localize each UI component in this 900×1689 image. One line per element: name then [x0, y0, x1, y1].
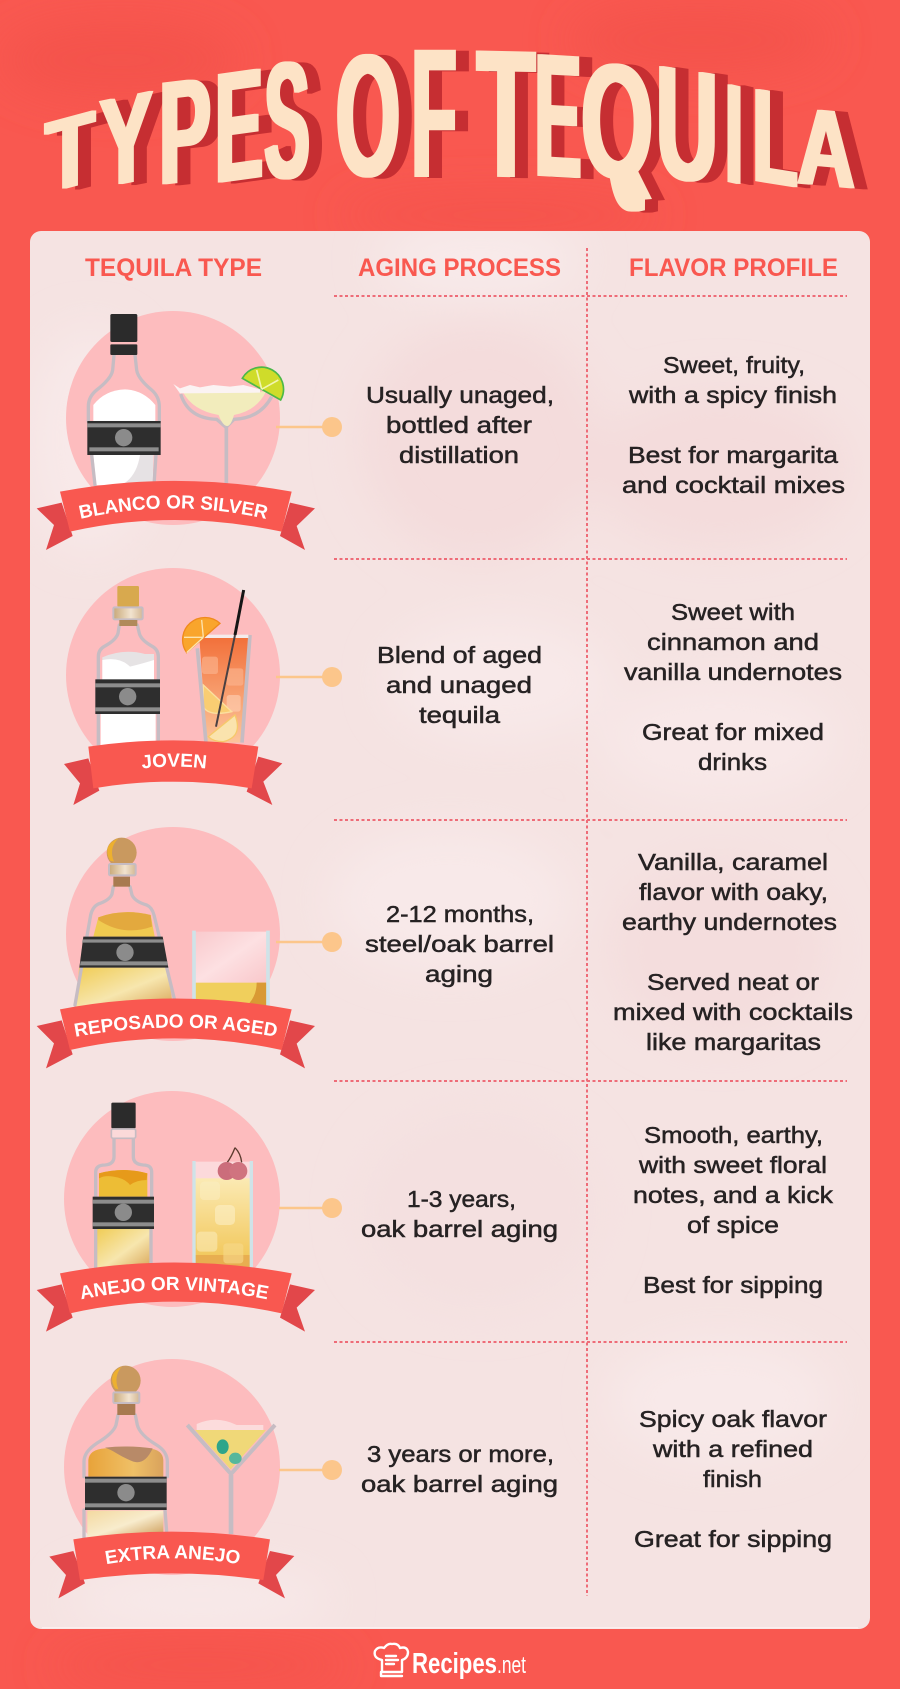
logo wordmark: Recipes: [412, 1648, 497, 1680]
connector: [276, 932, 342, 952]
title face layer: F: [411, 9, 457, 216]
ribbon: extra anejo: [49, 1532, 294, 1598]
column divider: vertical dashed: [586, 248, 588, 1596]
row 4: flavor text: notes, and a kick: [633, 1182, 833, 1208]
ribbon: joven: [64, 740, 282, 805]
icon: blanco bottle: [87, 314, 161, 485]
ribbon: blanco or silver: BLANCO OR SILVER: [78, 495, 268, 519]
connector: [276, 417, 342, 437]
heading: aging process: AGING PROCESS: [358, 254, 561, 282]
row 2: joven illustration: [64, 568, 342, 805]
row 4: flavor text: Smooth, earthy,: [644, 1122, 823, 1148]
ribbon: extra anejo: EXTRA ANEJO: [105, 1545, 240, 1564]
icon: extra anejo bottle: [84, 1366, 167, 1538]
circle backdrop: [64, 1091, 280, 1307]
title face layer: E: [535, 15, 581, 216]
title shadow layer: P: [172, 48, 224, 218]
title shadow layer: E: [228, 36, 276, 219]
row 1: flavor text: [622, 352, 845, 498]
row 5: aging text: [361, 1441, 558, 1497]
row 2: flavor text: Great for mixed: [642, 719, 824, 745]
column headings: [85, 254, 838, 282]
ribbon: reposado or aged: REPOSADO OR AGED: [74, 1014, 277, 1037]
row 1: flavor text: and cocktail mixes: [622, 472, 845, 498]
title shadow layer: A: [810, 86, 868, 214]
row 1: aging text: bottled after: [386, 412, 532, 438]
row 3: flavor text: Vanilla, caramel: [638, 849, 828, 875]
title shadow layer: Y: [112, 65, 166, 217]
icon: martini glass: [187, 1420, 275, 1534]
row 3: aging text: steel/oak barrel: [365, 931, 554, 957]
circle backdrop: [64, 1359, 280, 1575]
row 5: flavor text: finish: [703, 1466, 762, 1492]
logo suffix: .net: [497, 1652, 526, 1679]
title face layer: E: [215, 35, 263, 218]
row 5: flavor text: [634, 1406, 832, 1552]
connector: [279, 1460, 342, 1480]
title face layer: S: [264, 27, 310, 216]
ribbon: blanco or silver: [36, 480, 315, 550]
icon: margarita glass: [173, 367, 284, 484]
row 2: flavor text: Sweet with: [671, 599, 795, 625]
row 4: flavor text: of spice: [687, 1212, 779, 1238]
title shadow layer: L: [765, 62, 811, 218]
ribbon: reposado or aged: [36, 998, 315, 1068]
row 4: flavor text: Best for sipping: [643, 1272, 823, 1298]
row 3: flavor text: [613, 849, 853, 1055]
row 1: flavor text: Sweet, fruity,: [663, 352, 805, 378]
row 5: aging text: oak barrel aging: [361, 1471, 558, 1497]
row 3: flavor text: Served neat or: [647, 969, 819, 995]
row 4: aging text: 1-3 years,: [407, 1186, 516, 1212]
row 1: blanco or silver illustration: [36, 311, 342, 550]
title face layer: A: [797, 85, 855, 213]
icon: reposado bottle: [75, 838, 175, 1007]
row 1: aging text: distillation: [399, 442, 519, 468]
connector: [279, 1198, 342, 1218]
heading: flavor profile: FLAVOR PROFILE: [629, 254, 838, 282]
row 2: aging text: tequila: [419, 702, 501, 728]
row dividers: horizontal dotted: [334, 296, 847, 1342]
row 3: flavor text: earthy undernotes: [622, 909, 837, 935]
icon: rocks glass: [194, 931, 268, 1006]
row 1: aging text: [366, 382, 554, 468]
panel: table card: [30, 220, 870, 1630]
row 5: flavor text: Great for sipping: [634, 1526, 832, 1552]
title shadow layer: Q: [594, 28, 666, 218]
title face layer: [45, 9, 855, 219]
row 2: flavor text: cinnamon and: [647, 629, 819, 655]
title face layer: T: [45, 88, 95, 215]
row 1: aging text: Usually unaged,: [366, 382, 554, 408]
ribbon: anejo or vintage: [36, 1262, 315, 1332]
title face layer: U: [656, 31, 718, 219]
icon: tall glass with cherries: [194, 1148, 251, 1268]
row 5: extra anejo illustration: [49, 1359, 342, 1598]
title face layer: T: [477, 11, 535, 216]
icon: anejo bottle: [93, 1103, 154, 1268]
title shadow layer: T: [58, 89, 108, 216]
row 4: aging text: oak barrel aging: [361, 1216, 558, 1242]
row 1: flavor text: with a spicy finish: [628, 382, 837, 408]
row 5: flavor text: Spicy oak flavor: [639, 1406, 827, 1432]
row 3: aging text: [365, 901, 554, 987]
row 5: aging text: 3 years or more,: [367, 1441, 554, 1467]
title shadow layer: S: [277, 28, 323, 217]
title face layer: Q: [581, 27, 653, 217]
title face layer: I: [725, 54, 743, 216]
icon: chef hat book: [375, 1644, 408, 1676]
ribbon: joven: JOVEN: [142, 754, 206, 768]
circle backdrop: [66, 568, 280, 782]
title: types of tequila: [45, 9, 868, 220]
title shadow layer: F: [424, 10, 470, 217]
heading: tequila type: TEQUILA TYPE: [85, 254, 262, 282]
row 3: flavor text: mixed with cocktails: [613, 999, 853, 1025]
title shadow layer: E: [548, 16, 594, 217]
row 3: flavor text: flavor with oaky,: [639, 879, 828, 905]
title face layer: Y: [99, 64, 153, 216]
row 4: anejo illustration: [36, 1091, 342, 1332]
ribbon: anejo or vintage: ANEJO OR VINTAGE: [82, 1276, 269, 1300]
title face layer: L: [752, 61, 798, 217]
row 4: flavor text: [633, 1122, 833, 1298]
circle backdrop: [66, 827, 280, 1041]
row 4: flavor text: with sweet floral: [638, 1152, 827, 1178]
row 2: flavor text: drinks: [698, 749, 767, 775]
row 3: aging text: 2-12 months,: [386, 901, 534, 927]
row 3: aging text: aging: [425, 961, 493, 987]
row 2: flavor text: vanilla undernotes: [624, 659, 842, 685]
title face layer: P: [159, 47, 211, 217]
row 2: aging text: Blend of aged: [377, 642, 542, 668]
row 2: aging text: [377, 642, 542, 728]
row 4: aging text: [361, 1186, 558, 1242]
title shadow layer: [58, 10, 868, 220]
title shadow layer: O: [349, 20, 413, 215]
row 2: flavor text: [624, 599, 842, 775]
circle backdrop: [66, 311, 280, 525]
row 2: aging text: and unaged: [386, 672, 532, 698]
title shadow layer: I: [738, 55, 756, 217]
title shadow layer: U: [669, 32, 731, 220]
footer logo: recipes.net: [375, 1644, 526, 1680]
row 5: flavor text: with a refined: [652, 1436, 813, 1462]
connector: [276, 667, 342, 687]
icon: tall citrus cocktail: [183, 590, 250, 743]
row 3: reposado illustration: [36, 827, 342, 1068]
icon: joven bottle: [95, 586, 160, 745]
title face layer: O: [336, 19, 400, 214]
row 1: flavor text: Best for margarita: [628, 442, 839, 468]
title shadow layer: T: [490, 12, 548, 217]
row 3: flavor text: like margaritas: [646, 1029, 821, 1055]
